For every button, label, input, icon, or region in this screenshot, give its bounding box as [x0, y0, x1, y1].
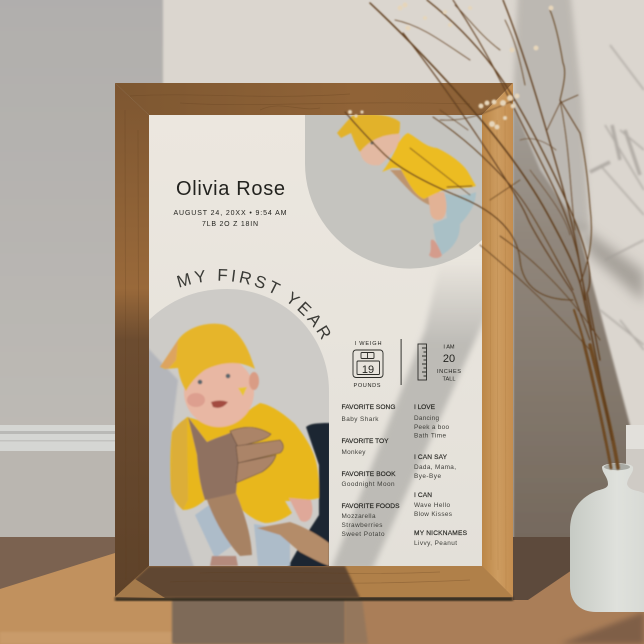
sweater: [170, 403, 319, 523]
foot: [210, 556, 238, 566]
dried flower clusters: [348, 2, 554, 130]
face: [184, 357, 254, 427]
right baseboard: [626, 425, 644, 539]
wall shadow right of frame: [513, 105, 630, 540]
birth date: AUGUST 24, 20XX • 9:54 AM: [174, 210, 287, 217]
icon: calendar scale: [353, 350, 383, 378]
holding hand: [188, 417, 240, 500]
left facts column: FAVORITE SONG: [342, 404, 396, 411]
light shadow band on poster: [330, 278, 482, 566]
weight block: I WEIGH: [354, 341, 382, 347]
right facts column: Dancing: [414, 415, 439, 422]
thigh: [428, 192, 446, 220]
right facts column: Peek a boo: [414, 424, 449, 431]
cheek: [187, 393, 205, 407]
hat ear: [160, 340, 178, 369]
weight block: [353, 341, 383, 389]
left facts column: Baby Shark: [342, 416, 379, 423]
foot: [429, 240, 442, 258]
eyes: [198, 374, 230, 384]
small hand: [289, 498, 312, 522]
right facts column: Wave Hello: [414, 502, 450, 509]
fingers: [230, 427, 283, 483]
right facts column: Livvy, Peanut: [414, 540, 457, 547]
right facts column: [414, 404, 468, 547]
left facts column: FAVORITE BOOK: [342, 471, 396, 478]
weight block: 19: [362, 364, 374, 376]
height block: 20: [443, 353, 455, 365]
dark clothing: [286, 423, 330, 570]
branch shadows on right wall: [590, 45, 644, 350]
heart: [238, 387, 247, 396]
forearm holding: [206, 493, 252, 556]
poster paper: [149, 115, 482, 566]
height block: I AM: [443, 344, 455, 350]
baby name: Olivia Rose: [176, 178, 285, 200]
height block: INCHES: [437, 369, 461, 375]
birth stats: 7LB 2O Z 18IN: [202, 221, 258, 228]
left sleeve lighter: [171, 418, 188, 510]
right facts column: I LOVE: [414, 404, 436, 411]
left facts column: Strawberries: [342, 522, 382, 529]
frame: [115, 83, 513, 598]
photo: baby top arch: [305, 115, 482, 268]
hat: [160, 324, 255, 391]
right facts column: Bye-Bye: [414, 473, 441, 480]
right facts column: MY NICKNAMES: [414, 530, 468, 537]
right facts column: Blow Kisses: [414, 511, 452, 518]
left facts column: Goodnight Moon: [342, 481, 395, 488]
photo: baby lower arch: [145, 285, 335, 570]
blue leg: [433, 192, 476, 255]
right facts column: I CAN: [414, 492, 432, 499]
dried plant branches: [345, 0, 618, 468]
second arm: [257, 522, 329, 566]
height block: TALL: [443, 376, 455, 382]
shade on photo: [149, 349, 194, 566]
left facts column: Monkey: [342, 449, 366, 456]
body skin: [390, 169, 430, 206]
left facts column: Mozzarella: [342, 513, 376, 520]
vase: [570, 463, 644, 612]
right facts column: I CAN SAY: [414, 454, 448, 461]
yellow outfit: [382, 133, 476, 199]
left facts column: [342, 404, 400, 538]
mouth: [211, 400, 228, 408]
icon: ruler: [418, 344, 426, 380]
weight block: POUNDS: [354, 383, 381, 389]
eye: [370, 142, 374, 144]
right facts column: Bath Time: [414, 432, 446, 440]
divider: [401, 339, 402, 385]
left facts column: FAVORITE TOY: [342, 438, 389, 445]
left facts column: FAVORITE FOODS: [342, 503, 400, 510]
left facts column: Sweet Potato: [342, 531, 385, 538]
hat: [337, 114, 400, 152]
face: [360, 134, 400, 165]
left baseboard: [0, 425, 115, 538]
curved title: MY FIRST YEAR: [176, 269, 330, 340]
ear: [249, 372, 259, 390]
right facts column: Dada, Mama,: [414, 464, 456, 471]
cast shadow band on right wall: [572, 220, 644, 302]
legs: [195, 503, 290, 566]
height block: [418, 344, 461, 382]
wood floor: [0, 537, 644, 644]
